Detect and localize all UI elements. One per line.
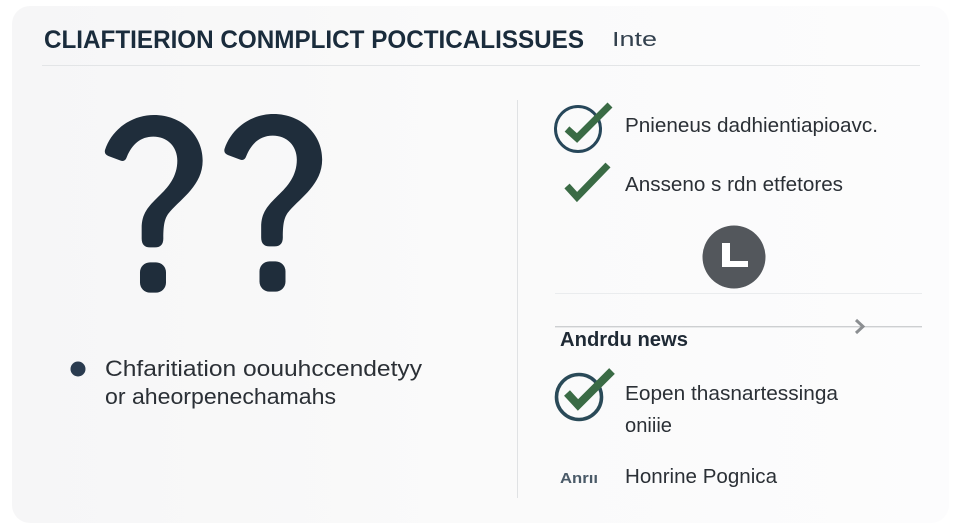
bullet text block: [70, 356, 422, 409]
icon: clock badge: [702, 226, 766, 288]
item text two: Ansseno s rdn etfetores: [625, 174, 843, 196]
arrow divider: [555, 320, 922, 333]
icon: circled check: [556, 105, 610, 152]
panel: right top checklist: [556, 105, 878, 197]
section heading: Andrdu news: [560, 329, 688, 351]
item text three continued: oniiie: [625, 415, 672, 437]
item text three: Eopen thasnartessinga: [625, 383, 839, 405]
bullet text line one: Chfaritiation oouuhccendetyy: [105, 356, 422, 381]
icon: circled check: [556, 371, 612, 420]
icon: first question mark: [105, 115, 203, 293]
panel: left question column: [70, 114, 422, 409]
title: CLIAFTIERION CONMPLICT POCTICALISSUES: [44, 26, 584, 54]
icon: check: [567, 165, 608, 197]
header tag: Inte: [612, 29, 657, 51]
item text one: Pnieneus dadhientiapioavc.: [625, 115, 878, 137]
icon: bullet: [70, 362, 86, 376]
small label: Anrıı: [560, 470, 598, 487]
item text four: Honrine Pognica: [625, 466, 778, 488]
icon: second question mark: [224, 114, 322, 292]
header: [42, 26, 920, 66]
panel: right lower section: [556, 329, 839, 488]
bullet text line two: or aheorpenechamahs: [105, 384, 336, 409]
